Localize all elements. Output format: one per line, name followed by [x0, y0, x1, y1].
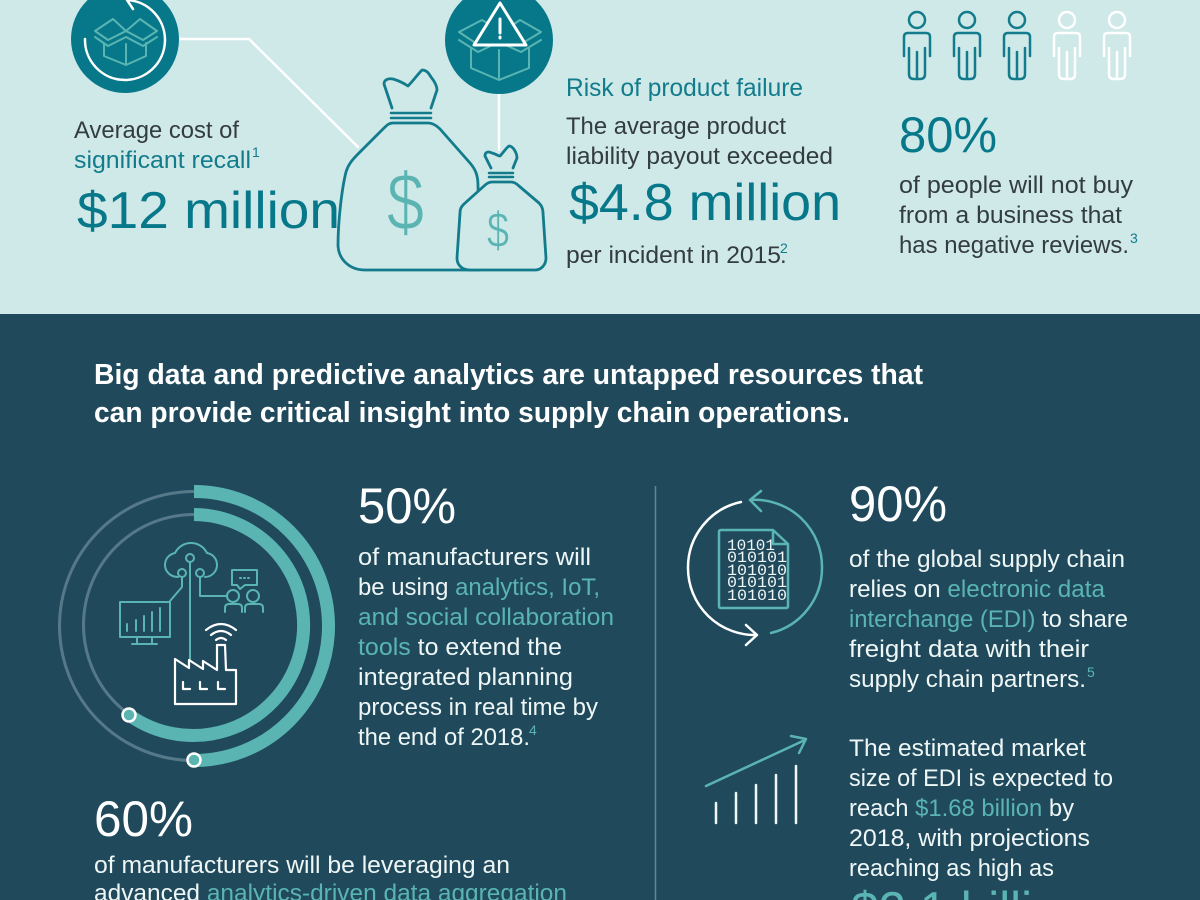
- icon: EDI data document cycle: 010101: [727, 574, 787, 592]
- icon: rising bar chart with arrow: [706, 736, 806, 823]
- connector lines: [179, 39, 499, 150]
- heading: [94, 359, 923, 429]
- panel: big data background: [0, 314, 1200, 900]
- dollar sign: $: [387, 156, 424, 247]
- text: 80 percent negative reviews: 80%: [899, 107, 997, 163]
- text: 50 percent of manufacturers: of manufacturers will: [358, 544, 591, 571]
- icon: EDI data document cycle: 101010: [727, 587, 787, 605]
- text: risk of product failure: The average product: [566, 113, 786, 140]
- text: 50 percent of manufacturers: integrated planning: [358, 664, 573, 691]
- text: risk of product failure: 2: [780, 240, 788, 256]
- text: average cost of recall: $12 million: [77, 182, 340, 240]
- small dollar sign: $: [487, 202, 509, 258]
- text: 80 percent negative reviews: [899, 107, 1138, 259]
- icon: EDI data document cycle: 10101: [727, 537, 775, 555]
- text: risk of product failure: $4.8 million: [569, 174, 841, 232]
- text: 60 percent of manufacturers: of manufacturers will be leveraging an: [94, 852, 510, 879]
- text: EDI market size: size of EDI is expected to: [849, 765, 1113, 792]
- text: 50 percent of manufacturers: be using analytics, IoT,: [358, 574, 600, 601]
- text: 50 percent of manufacturers: process in real time by: [358, 694, 598, 721]
- text: risk of product failure: Risk of product failure: [566, 74, 803, 102]
- text: EDI market size: reach $1.68 billion by: [849, 795, 1074, 822]
- text: 50 percent of manufacturers: [358, 478, 614, 751]
- icon: warning box: [445, 0, 553, 94]
- vertical divider: [654, 486, 656, 900]
- text: EDI market size: reaching as high as: [849, 855, 1054, 882]
- text: 90 percent EDI: 5: [1087, 664, 1095, 680]
- text: 50 percent of manufacturers: tools to extend the: [358, 634, 562, 661]
- chart: double ring gauge: [60, 492, 328, 766]
- heading: Big data and predictive analytics are untapped resources that: [94, 359, 923, 391]
- icon: EDI data document cycle: 101010: [727, 562, 787, 580]
- icon: large money bag: [338, 70, 480, 270]
- icon: recall box: [71, 0, 179, 93]
- text: 50 percent of manufacturers: and social collaboration: [358, 604, 614, 631]
- heading: can provide critical insight into supply chain operations.: [94, 397, 850, 429]
- text: 80 percent negative reviews: of people will not buy: [899, 172, 1133, 199]
- text: 50 percent of manufacturers: 50%: [358, 478, 456, 534]
- text: risk of product failure: per incident in 2015: [566, 242, 781, 269]
- text: 90 percent EDI: freight data with their: [849, 636, 1089, 663]
- text: 80 percent negative reviews: from a business that: [899, 202, 1122, 229]
- text: 90 percent EDI: relies on electronic data: [849, 576, 1106, 603]
- text: average cost of recall: significant recall: [74, 147, 251, 174]
- icon: EDI data document cycle: 010101: [727, 549, 787, 567]
- icon: cloud network, monitor and people: [120, 543, 263, 660]
- icon: small money bag: [457, 146, 546, 270]
- text: 80 percent negative reviews: has negative reviews.: [899, 232, 1129, 259]
- text: EDI market size: The estimated market: [849, 735, 1086, 762]
- text: 90 percent EDI: of the global supply chain: [849, 546, 1125, 573]
- icon: factory with wifi: [175, 624, 236, 704]
- text: average cost of recall: 1: [252, 144, 260, 160]
- text: 50 percent of manufacturers: 4: [529, 722, 537, 738]
- text: 90 percent EDI: supply chain partners.: [849, 666, 1086, 693]
- text: EDI market size: 2018, with projections: [849, 825, 1090, 852]
- text: EDI market size: [849, 735, 1113, 900]
- text: average cost of recall: [74, 117, 340, 240]
- text: risk of product failure: liability payout exceeded: [566, 143, 833, 170]
- text: 90 percent EDI: interchange (EDI) to share: [849, 606, 1128, 633]
- panel: top risks background: [0, 0, 1200, 314]
- icon row: people 80 percent: [904, 12, 1130, 79]
- text: 50 percent of manufacturers: the end of 2018.: [358, 724, 530, 751]
- text: risk of product failure: .: [780, 242, 787, 269]
- text: 60 percent of manufacturers: 60%: [94, 791, 193, 847]
- text: 60 percent of manufacturers: [94, 791, 567, 900]
- icon: EDI data document cycle: [688, 491, 822, 645]
- text: risk of product failure: [566, 74, 841, 269]
- text: 80 percent negative reviews: 3: [1130, 230, 1138, 246]
- text: 90 percent EDI: [849, 476, 1128, 693]
- text: 90 percent EDI: 90%: [849, 476, 947, 532]
- text: average cost of recall: Average cost of: [74, 117, 239, 144]
